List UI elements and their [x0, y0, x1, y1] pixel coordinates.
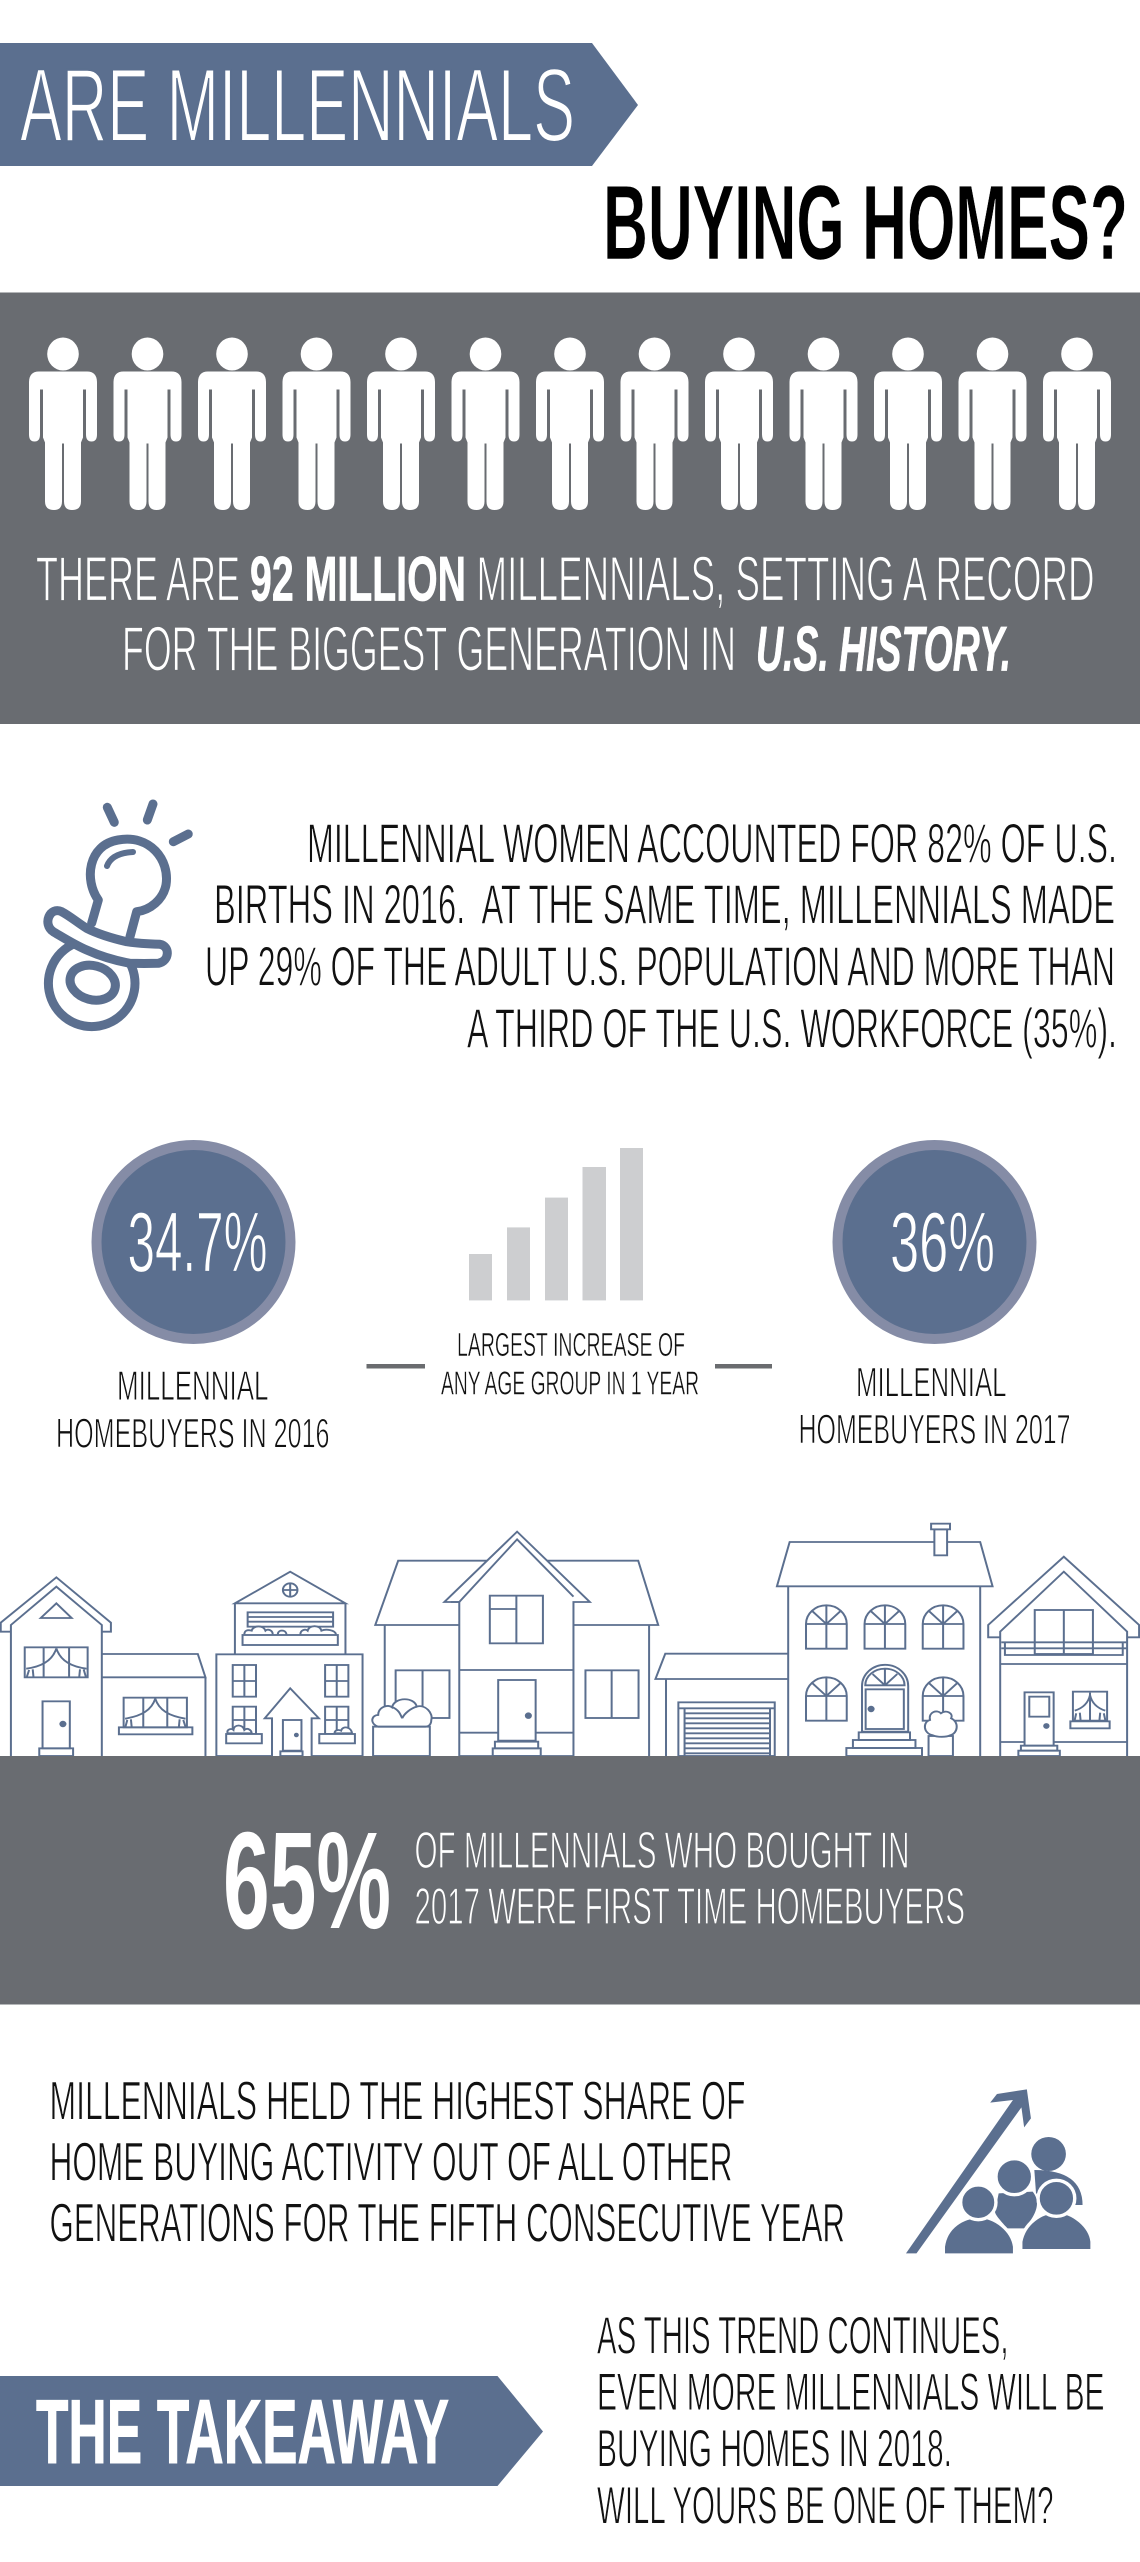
- panel: 92 million millennials: [0, 292, 1140, 724]
- statement text: [36, 544, 1094, 684]
- panel: 65 percent first time homebuyers: [0, 1756, 1140, 2004]
- stat circle: 36 percent: 36%: [890, 1196, 995, 1290]
- icon: group of people with rising arrow: [906, 2089, 1092, 2255]
- panel: 65 percent first time homebuyers: 65%: [223, 1804, 391, 1958]
- title banner: are millennials: ARE MILLENNIALS: [20, 48, 575, 164]
- title banner: are millennials: [0, 43, 638, 166]
- banner: the takeaway: THE TAKEAWAY: [36, 2382, 449, 2483]
- text block: highest share: [50, 2070, 845, 2254]
- text block: conclusion: [597, 2306, 1104, 2536]
- stat circle: 34.7 percent: 34.7%: [128, 1196, 268, 1290]
- label: homebuyers 2017: MILLENNIAL: [856, 1358, 1006, 1406]
- statement text: THERE ARE: [36, 544, 240, 614]
- house 1 with annex: [1, 1577, 205, 1756]
- label: homebuyers 2016: [56, 1362, 330, 1456]
- house 2 with gable and porch: [216, 1572, 363, 1756]
- callout: largest increase: ANY AGE GROUP IN 1 YEAR: [441, 1364, 699, 1402]
- garage, house 4 and house 5: [655, 1524, 1139, 1756]
- label: homebuyers 2016: HOMEBUYERS IN 2016: [56, 1410, 330, 1456]
- callout: largest increase: [366, 1326, 772, 1402]
- label: homebuyers 2016: MILLENNIAL: [117, 1362, 268, 1409]
- text block: births and workforce: [205, 812, 1117, 1060]
- icon: pacifier: [48, 804, 188, 1027]
- stat circle: 36 percent: [838, 1145, 1032, 1339]
- label: homebuyers 2017: [798, 1358, 1070, 1452]
- callout: largest increase: LARGEST INCREASE OF: [457, 1326, 685, 1363]
- statement text: 92 MILLION: [250, 544, 466, 614]
- row of 13 people icons: [29, 338, 1111, 510]
- bar chart: rising bars: [469, 1148, 643, 1300]
- house 3 large gable: [372, 1532, 658, 1756]
- illustration: row of houses: [1, 1524, 1139, 1756]
- banner: the takeaway: [0, 2376, 543, 2486]
- stat circle: 34.7 percent: [96, 1145, 290, 1339]
